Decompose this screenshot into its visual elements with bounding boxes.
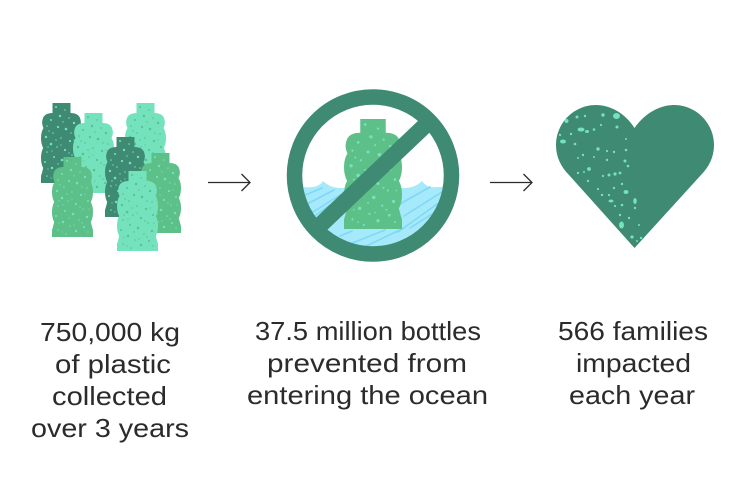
arrow: second	[490, 174, 532, 191]
icon: heart	[556, 105, 714, 248]
text: bottles prevented: 37.5 million bottles	[255, 316, 481, 346]
icon: prohibition sign	[294, 97, 452, 254]
arrow: first	[208, 174, 250, 191]
panel: bottles prevented	[247, 97, 488, 410]
icon: bottle	[344, 119, 402, 229]
text: families impacted: 566 families	[558, 316, 708, 346]
icon: group of bottles	[41, 103, 181, 251]
text: bottles prevented: entering the ocean	[247, 380, 488, 410]
panel: families impacted	[556, 105, 714, 410]
text: bottles prevented	[247, 316, 488, 410]
text: plastic collected: collected	[52, 381, 167, 411]
text: families impacted: each year	[569, 380, 695, 410]
text: plastic collected: of plastic	[55, 349, 171, 379]
icon: ocean water	[303, 181, 443, 246]
infographic canvas	[32, 89, 714, 442]
text: families impacted: impacted	[576, 348, 691, 378]
panel: plastic collected	[31, 103, 189, 443]
text: plastic collected	[31, 317, 189, 443]
text: plastic collected: over 3 years	[31, 413, 189, 443]
text: families impacted	[558, 316, 708, 410]
text: bottles prevented: prevented from	[267, 348, 467, 378]
text: plastic collected: 750,000 kg	[40, 317, 180, 347]
